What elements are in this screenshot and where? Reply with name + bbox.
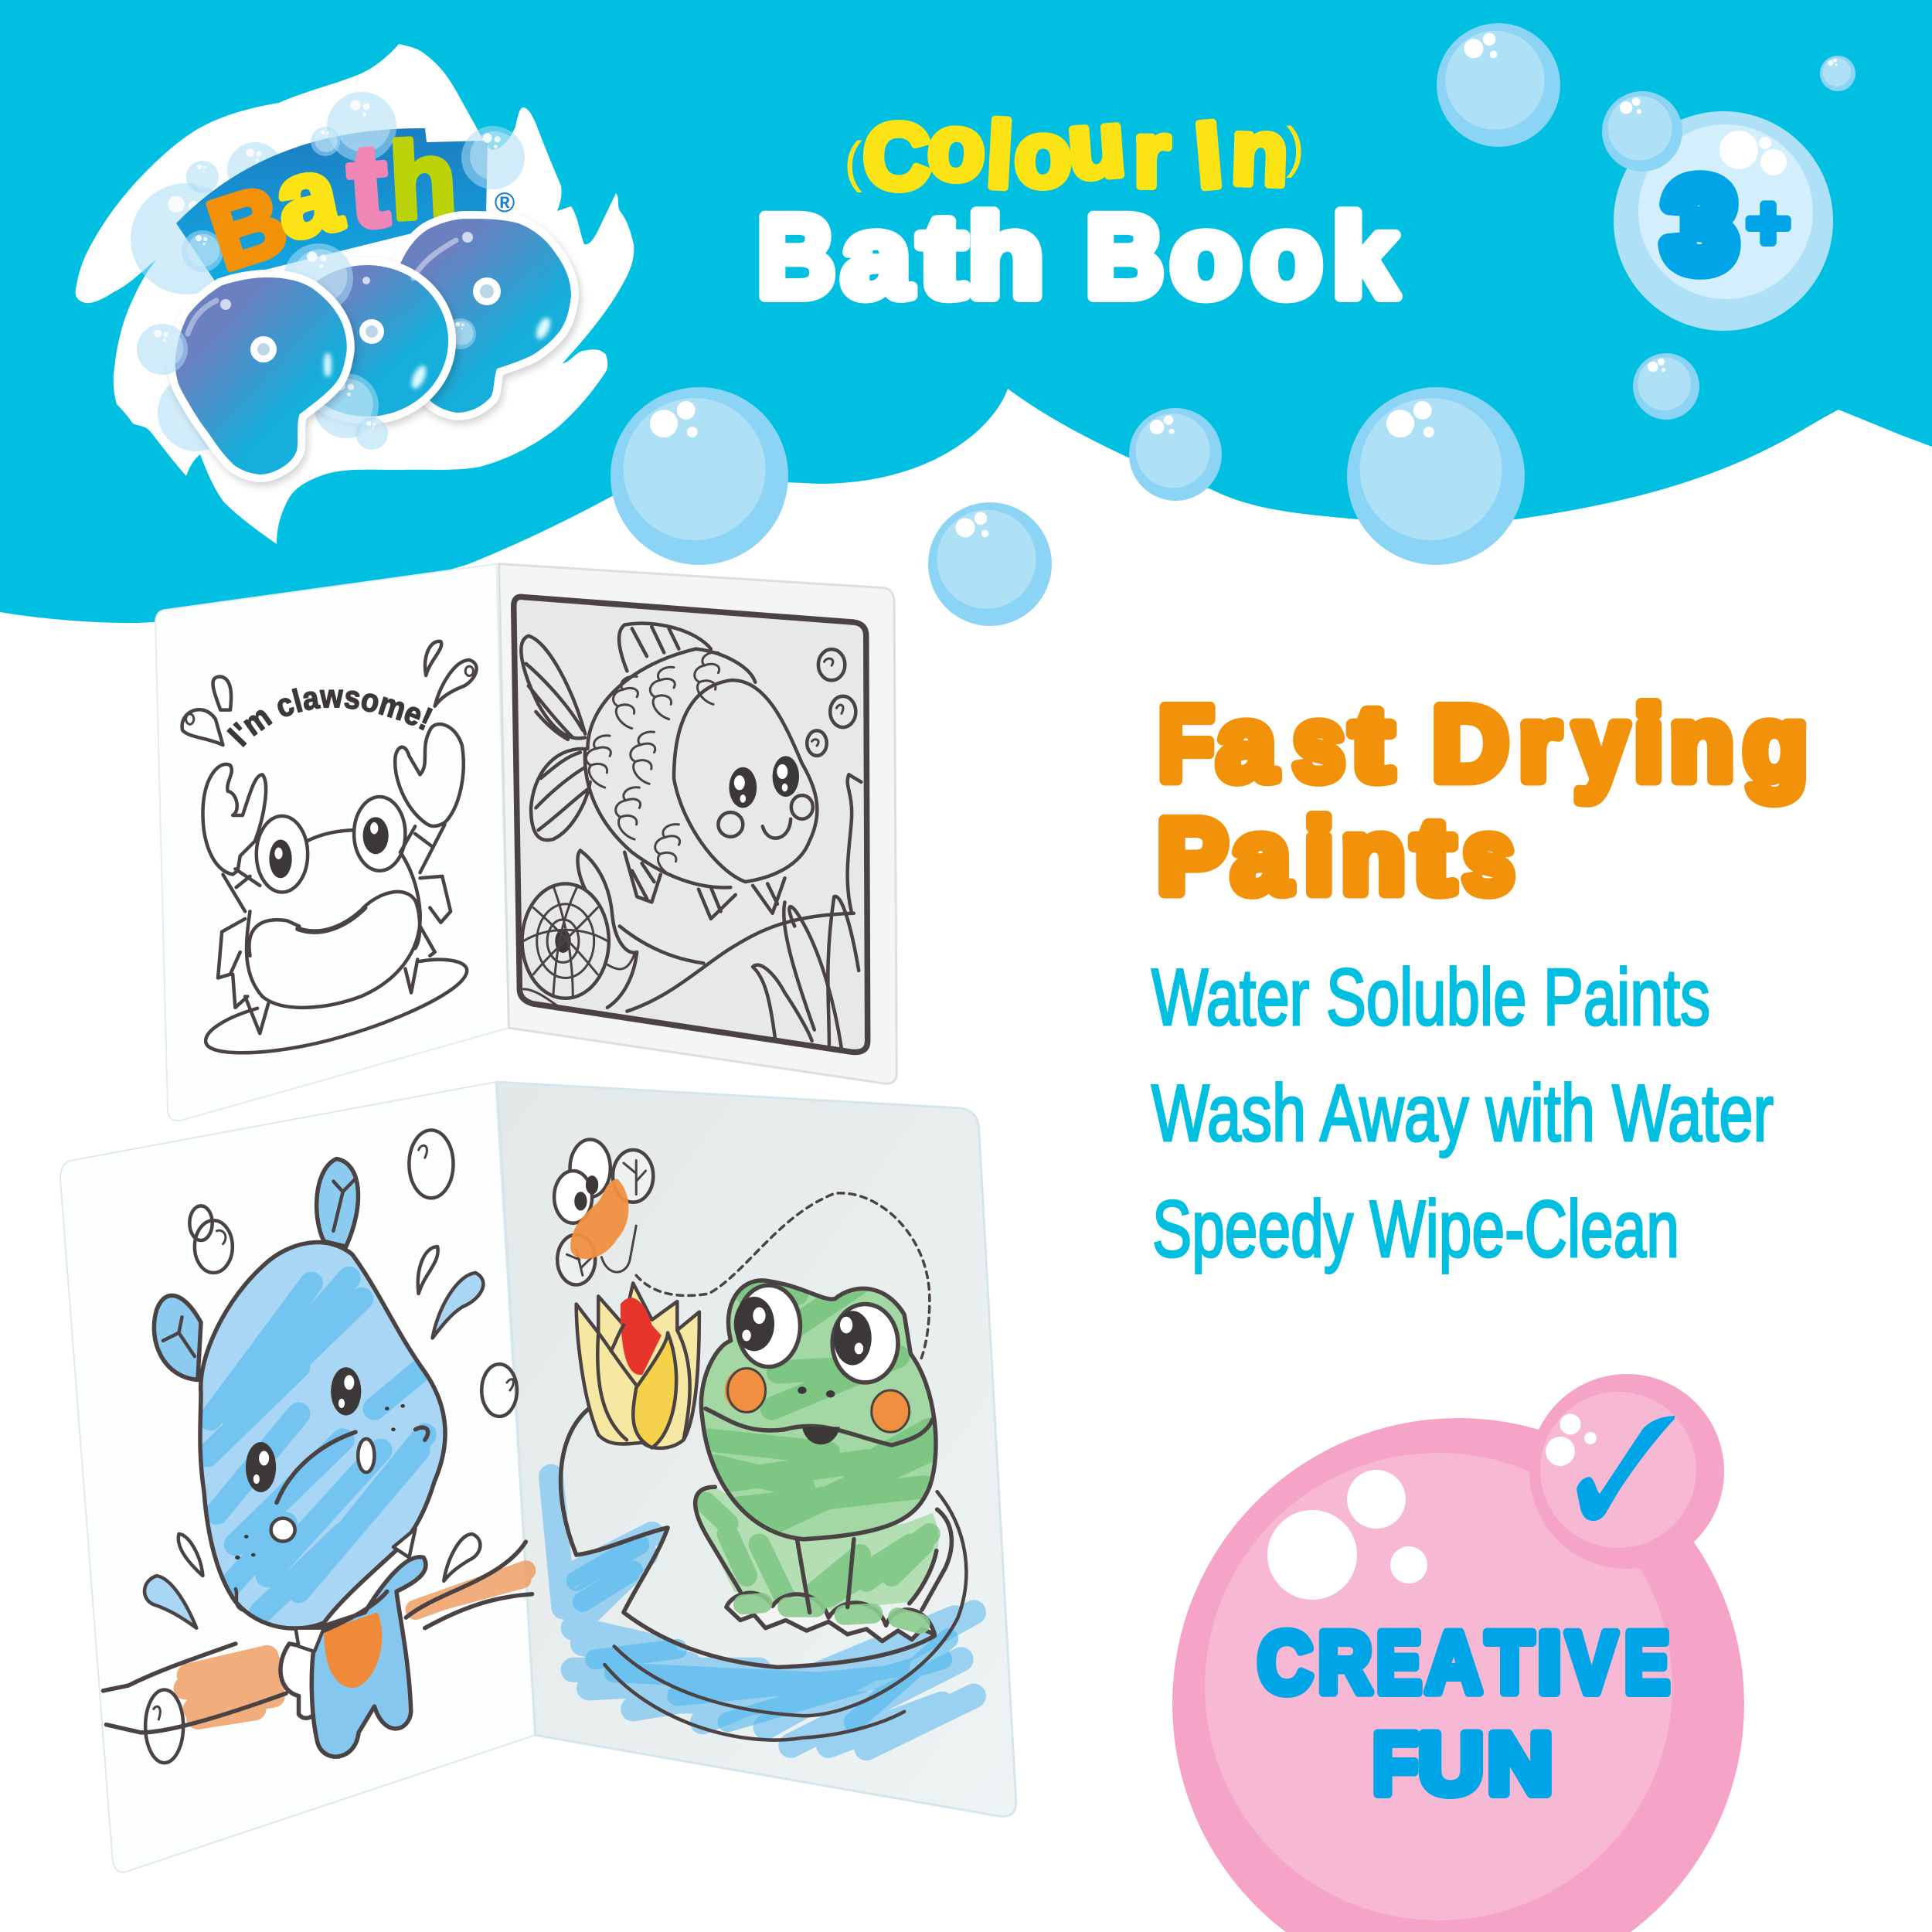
title: Bath Book: B	[1086, 192, 1164, 321]
logo bubble on back P	[445, 318, 476, 349]
bottom book right page	[498, 1082, 1016, 1816]
frog toe colour	[743, 1603, 920, 1624]
frog legs	[696, 1487, 939, 1612]
branch scribbles	[103, 1542, 532, 1733]
fly	[554, 1140, 653, 1284]
logo word: Bath: h	[387, 117, 459, 242]
badge text: creative: C	[1258, 1614, 1312, 1711]
lily pad and water	[551, 1409, 974, 1748]
logo blue banner	[176, 128, 488, 282]
badge text: creative: I	[1538, 1614, 1562, 1711]
title parentheses: (	[844, 131, 862, 193]
hippo head outline	[200, 1243, 445, 1628]
water scribbles	[551, 1477, 974, 1748]
bubble: small top right	[1820, 56, 1855, 91]
heading: Fast Drying Paints: n	[1342, 798, 1406, 915]
bottom book left page	[60, 1082, 536, 1872]
book: bottom, coloured	[60, 1082, 1016, 1872]
feature text: wipe clean: Speedy Wipe-Clean	[1152, 1185, 1679, 1274]
badge text: creative: E	[1376, 1614, 1422, 1711]
badge text: fun: N	[1487, 1716, 1553, 1812]
heading: Fast Drying Paints: y	[1574, 685, 1628, 802]
hippo body	[311, 1557, 426, 1757]
title parentheses	[844, 117, 1304, 193]
logo word: Bath: a	[265, 131, 349, 262]
badge text: creative: A	[1425, 1614, 1482, 1711]
top book left page	[155, 564, 509, 1121]
logo letter P back	[379, 215, 575, 417]
title: Bath Book: h	[968, 192, 1043, 321]
frog leg scribbles	[706, 1502, 930, 1597]
heading: Fast Drying Paints: r	[1519, 685, 1560, 802]
bubble: wave mid	[1129, 408, 1222, 501]
title: Bath Book: B	[757, 192, 835, 321]
frog body colour	[701, 1281, 936, 1539]
registered mark: ®	[495, 186, 515, 218]
logo word: Bath: B	[197, 164, 299, 291]
heading: Fast Drying Paints: P	[1158, 798, 1227, 915]
heading: Fast Drying Paints: a	[1232, 798, 1291, 915]
bubble: lower right	[1633, 353, 1699, 420]
badge text: fun: U	[1418, 1716, 1484, 1812]
frog feet	[726, 1593, 934, 1641]
darker water scribbles	[577, 1544, 948, 1722]
frog cheeks	[725, 1369, 910, 1432]
hippo arm and back leg	[281, 1644, 318, 1718]
badge text: creative: E	[1624, 1614, 1669, 1711]
background wave: blue header	[0, 0, 1932, 623]
dashed flight path	[636, 1193, 930, 1362]
hippo	[103, 1130, 532, 1763]
top book drawing group	[155, 564, 896, 1121]
pink highlights	[1267, 1470, 1427, 1600]
heading: Fast Drying Paints: t	[1413, 798, 1454, 915]
crab	[182, 641, 477, 1053]
pad outlines	[561, 1409, 934, 1667]
age text 3: 3	[1666, 155, 1734, 294]
hippo belly	[324, 1612, 382, 1688]
logo white splash	[76, 44, 634, 544]
logo P eyes and glints	[188, 232, 553, 390]
heading: Fast Drying Paints: s	[1293, 685, 1345, 802]
icon: check mark	[1577, 1416, 1675, 1521]
badge text: creative: R	[1318, 1614, 1372, 1711]
bubble: wave right	[1347, 387, 1525, 565]
logo word: Bath: t	[345, 120, 392, 252]
feature text: water soluble: Water Soluble Paints	[1151, 953, 1710, 1043]
bubble: top	[1437, 23, 1560, 147]
logo bubbles behind	[131, 142, 283, 451]
title: Bath Book: k	[1332, 192, 1397, 321]
frog	[696, 1278, 951, 1641]
water drops and bubbles around hippo	[145, 1130, 517, 1763]
title: Bath Book: a	[842, 192, 912, 321]
logo letter P front	[172, 274, 351, 478]
badge text: creative: T	[1486, 1614, 1533, 1711]
heading: Fast Drying Paints: F	[1158, 685, 1213, 802]
title: Bath Book: t	[920, 192, 966, 321]
logo word: Bath	[197, 117, 459, 291]
book: top, uncoloured	[155, 563, 898, 1121]
seabed and seaweed	[620, 774, 861, 1048]
badge: creative fun pink bubble	[1172, 1374, 1744, 1932]
frog outline	[701, 1281, 936, 1539]
fish	[521, 624, 855, 919]
logo bubbles over banner	[182, 92, 525, 272]
frog mouth and nostrils	[706, 1386, 933, 1445]
fish scales	[586, 652, 719, 876]
age badge bubble 3+	[1614, 111, 1833, 331]
frog eyes	[734, 1285, 898, 1383]
logo bubble front	[137, 324, 188, 375]
title parentheses: )	[1286, 117, 1304, 179]
logo letter P middle	[282, 261, 452, 420]
badge text: fun: F	[1372, 1716, 1418, 1812]
heading: Fast Drying Paints: D	[1433, 685, 1509, 802]
bubble: wave left	[611, 387, 788, 565]
title: Bath Book: o	[1171, 192, 1241, 321]
small pink bubble with tick	[1529, 1374, 1724, 1569]
badge text: creative: V	[1566, 1614, 1617, 1711]
heading: Fast Drying Paints: t	[1351, 685, 1393, 802]
heading: Fast Drying Paints: s	[1462, 798, 1515, 915]
hippo head scribbles	[207, 1278, 425, 1612]
title: Bath Book: o	[1251, 192, 1322, 321]
heading: Fast Drying Paints: n	[1669, 685, 1734, 802]
pink bubble inner	[1205, 1453, 1672, 1920]
title: Colour In: Colour In	[863, 91, 1290, 209]
water ripple lines	[604, 1492, 966, 1740]
bubble: near book	[928, 502, 1052, 626]
logo: Bath Pop	[76, 44, 634, 544]
top book right page	[499, 564, 896, 1083]
age text plus: +	[1747, 182, 1790, 264]
heading: Fast Drying Paints: g	[1743, 685, 1808, 802]
lily flower	[577, 1283, 699, 1448]
heading: Fast Drying Paints: i	[1634, 685, 1663, 802]
logo bubbles between	[284, 243, 388, 450]
pink bubble outer	[1172, 1418, 1744, 1932]
bubble: beside badge	[1602, 91, 1682, 172]
hippo ears	[154, 1159, 358, 1380]
snail shell	[522, 850, 637, 1009]
hippo face	[235, 1367, 428, 1651]
heading: Fast Drying Paints	[1158, 685, 1808, 915]
frog body scribbles	[709, 1278, 930, 1526]
hippo head colour	[200, 1243, 445, 1628]
top book printed panel	[514, 597, 868, 1052]
heading: Fast Drying Paints: i	[1304, 798, 1334, 915]
heading: Fast Drying Paints: a	[1217, 685, 1277, 802]
top book caption: I'm clawsome!	[226, 688, 433, 747]
